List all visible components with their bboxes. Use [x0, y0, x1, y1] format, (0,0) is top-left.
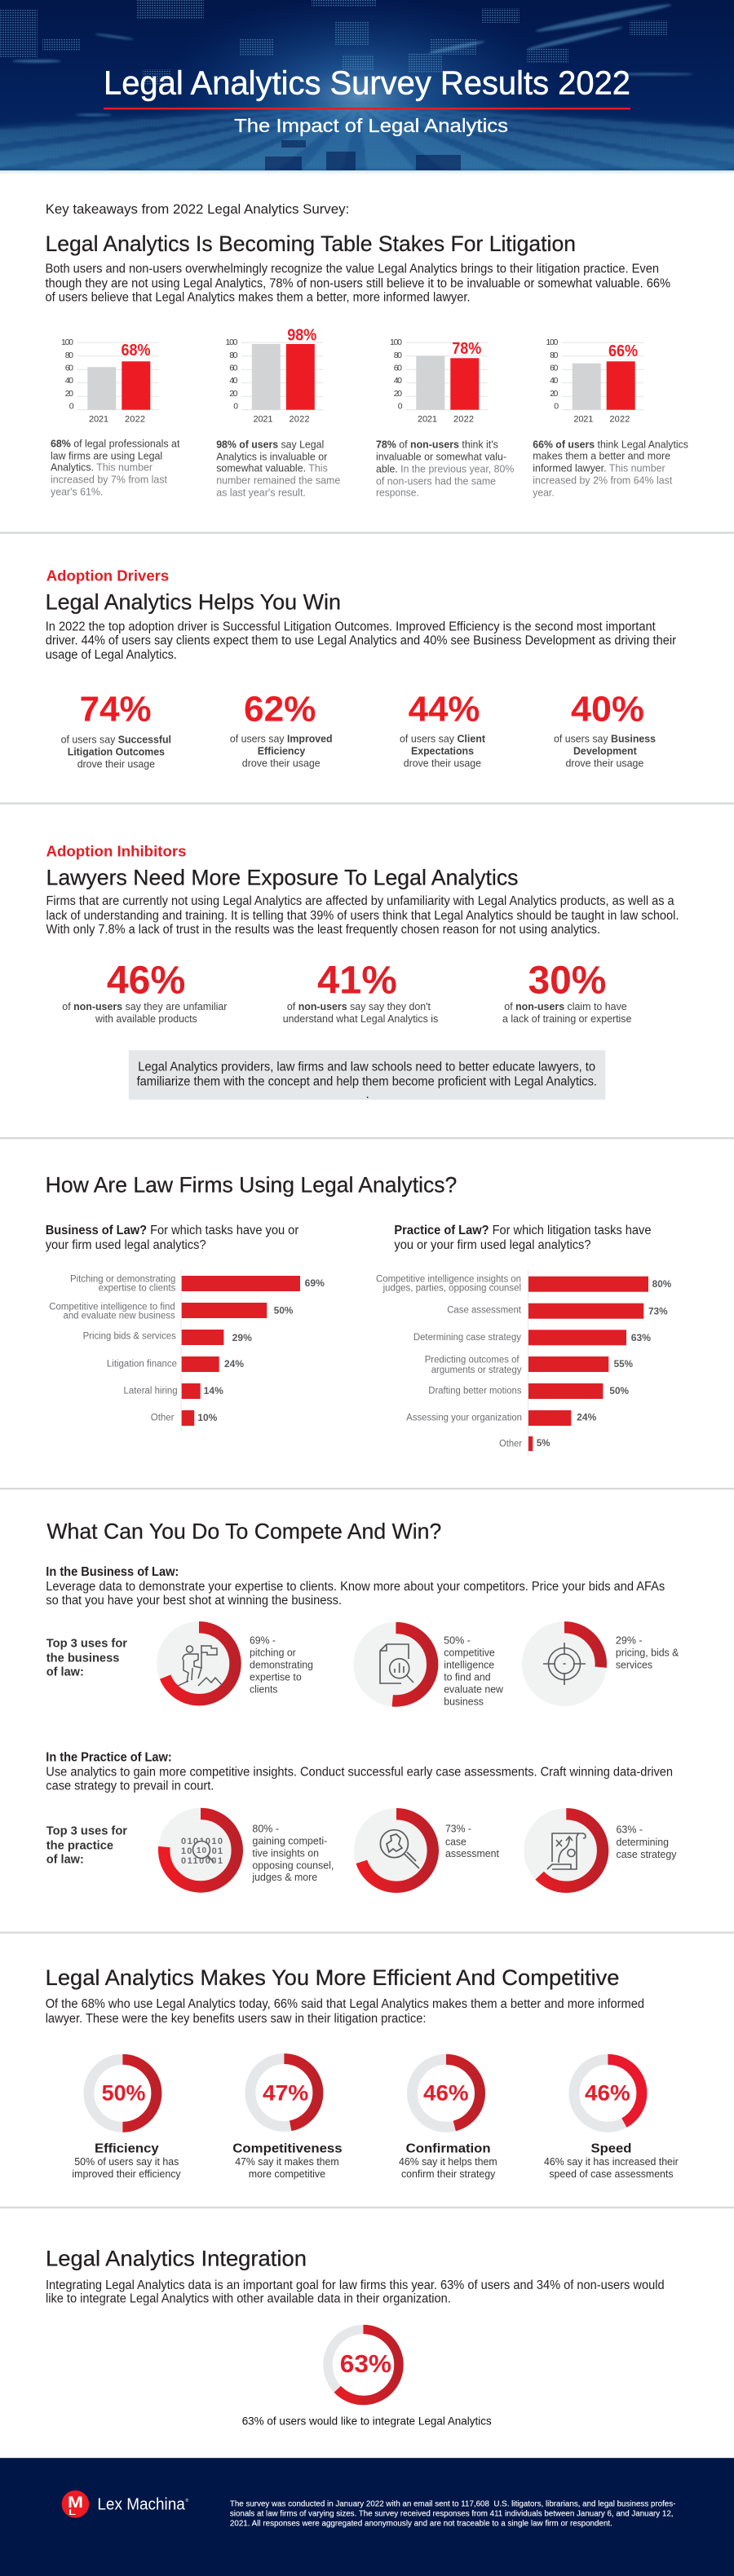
ring: 63%: 63%: [340, 2349, 391, 2378]
ring: competitiveness: [250, 2059, 318, 2126]
label: top 3 business: [46, 1637, 127, 1679]
text: practice of law: Use analytics to gain more competitive insights. Conduct successful early case assessments. Craft winning data-driven: [46, 1765, 673, 1779]
stat: 41%: of non-users say say they don't: [287, 1001, 431, 1012]
caption: 78%: 78% of non-users think it's: [376, 439, 498, 451]
caption: 98%: [216, 439, 340, 499]
caption: 78%: [376, 439, 514, 499]
body text: Integrating Legal Analytics data is an important goal for law firms this year. 63% of users and 34% of non-users would: [46, 2278, 665, 2292]
bar chart: business of law: 14%: [204, 1387, 223, 1396]
bar chart: 68%: 60: [65, 364, 73, 373]
bar chart: 66%: 66%: [608, 342, 638, 360]
intro line: Key takeaways from 2022 Legal Analytics Survey:: [46, 201, 349, 217]
label: 63%: [617, 1824, 677, 1860]
eyebrow: Adoption Inhibitors: [46, 843, 186, 860]
ring: 63%: [328, 2330, 399, 2400]
label: 73%: [445, 1824, 500, 1859]
bar chart: practice of law: 80%: [652, 1280, 671, 1290]
stat: 40%: 40%: [571, 689, 644, 729]
benefit: speed: speed of case assessments: [549, 2168, 674, 2180]
label: 73%: 73% -: [445, 1824, 471, 1835]
bar chart: practice of law: 55%: [614, 1360, 633, 1370]
label: 50%: intelligence: [444, 1660, 494, 1671]
stat: 40%: [554, 689, 656, 770]
icon: binary with magnifier: 0101010: [181, 1837, 223, 1846]
heading: Legal Analytics Integration: [46, 2246, 307, 2270]
panel: adoption inhibitors: [46, 843, 679, 1101]
bar chart: 68%: 68%: [121, 342, 151, 359]
benefit: efficiency: improved their efficiency: [72, 2168, 181, 2180]
bar chart: business of law: [49, 1269, 325, 1431]
ring: efficiency: [89, 2059, 157, 2127]
title: Legal Analytics Survey Results 2022: [104, 64, 630, 102]
label: 50%: to find and: [444, 1672, 491, 1683]
text: practice of law: case strategy to prevail in court.: [46, 1780, 214, 1793]
stat: 30%: 30%: [528, 959, 606, 1003]
donut: 80% insights: [158, 1808, 243, 1893]
stat: 74%: 74%: [80, 689, 152, 729]
donut: 69% pitching: [157, 1621, 241, 1705]
body text: [46, 262, 670, 305]
stat: 74%: drove their usage: [77, 759, 155, 770]
body text: [46, 2278, 665, 2306]
caption: 66%: informed lawyer. This number: [533, 463, 665, 474]
bar chart: practice of law: Assessing your organization: [406, 1414, 522, 1423]
benefit: efficiency: Efficiency: [95, 2142, 159, 2156]
text: business of law: so that you have your best shot at winning the business.: [46, 1594, 342, 1608]
heading: Legal Analytics Helps You Win: [46, 590, 341, 615]
bar chart: 98%: 60: [229, 364, 238, 373]
bar chart: 66%: 0: [554, 401, 559, 411]
caption: 68%: year's 61%.: [51, 487, 103, 498]
bar chart: practice of law: Case assessment: [447, 1306, 522, 1316]
benefit: competitiveness: 47% say it makes them: [235, 2156, 339, 2168]
caption: 68%: Analytics. This number: [51, 462, 153, 474]
bar chart: 66%: 60: [550, 364, 559, 373]
label: 63%: 63% -: [617, 1824, 643, 1835]
bar chart: 78%: 0: [398, 401, 403, 411]
icon: binary with magnifier: 0110001: [181, 1856, 223, 1866]
panel: adoption drivers: [46, 567, 676, 770]
ring: confirmation: 46%: [423, 2081, 469, 2106]
callout: [129, 1050, 605, 1101]
question: business of law: your firm used legal analytics?: [46, 1238, 206, 1252]
benefit: confirmation: Confirmation: [406, 2142, 491, 2156]
label: 29%: 29% -: [616, 1635, 643, 1647]
label: top 3 business: Top 3 uses for: [46, 1637, 127, 1650]
bar chart: 68%: 0: [69, 401, 74, 411]
bar chart: 98%: 80: [229, 351, 238, 360]
methodology note: sionals at law firms of varying sizes. The survey received responses from 411 individuals between January 6, and January 12,: [230, 2509, 673, 2519]
logo: [62, 2490, 189, 2518]
label: 29%: [616, 1635, 679, 1671]
bar chart: 98%: 98%: [287, 326, 316, 344]
bar chart: 68%: 80: [65, 351, 73, 360]
panel: integration: [46, 2246, 665, 2427]
benefit: speed: 46% say it has increased their: [544, 2156, 679, 2168]
body text: Firms that are currently not using Legal Analytics are affected by unfamiliarity with Legal Analytics products, as well as a: [46, 894, 674, 908]
eyebrow: Adoption Drivers: [46, 567, 169, 584]
bar chart: practice of law: Drafting better motions: [428, 1387, 522, 1396]
bar chart: business of law: 10%: [197, 1414, 217, 1423]
body text: [46, 894, 679, 937]
logo: ®: [186, 2498, 189, 2503]
body text: [46, 620, 676, 662]
ring caption: 63% of users would like to integrate Legal Analytics: [242, 2414, 492, 2427]
callout: Legal Analytics providers, law firms and law schools need to better educate lawyers, to: [138, 1060, 595, 1074]
bar chart: 98%: 40: [229, 376, 238, 386]
ring: efficiency: 50%: [102, 2081, 145, 2106]
icon: climber with flag: [178, 1645, 223, 1686]
caption: 98%: number remained the same: [216, 475, 340, 487]
panel: efficient and competitive: [46, 1965, 679, 2180]
stat: 40%: of users say Business: [554, 734, 656, 745]
stat: 62%: Efficiency: [258, 746, 305, 757]
label: 29%: pricing, bids &: [616, 1647, 679, 1659]
label: 73%: assessment: [445, 1848, 500, 1859]
label: 80%: tive insights on: [252, 1847, 319, 1859]
caption: 78%: of non-users had the same: [376, 476, 496, 487]
stat: 74%: of users say Successful: [61, 734, 171, 746]
icon: target: [543, 1643, 586, 1685]
label: top 3 practice: [46, 1825, 127, 1867]
bar chart: practice of law: 24%: [577, 1413, 596, 1423]
body text: though they are not using Legal Analytics, 78% of non-users still believe it to be invaluable or somewhat valuable. 66%: [46, 276, 670, 290]
icon: binary with magnifier: [181, 1837, 223, 1866]
heading: What Can You Do To Compete And Win?: [46, 1520, 441, 1544]
bar chart: business of law: Lateral hiring: [124, 1387, 178, 1396]
body text: usage of Legal Analytics.: [46, 648, 177, 662]
heading: Lawyers Need More Exposure To Legal Analytics: [46, 865, 519, 889]
stat: 46%: [62, 959, 227, 1025]
body text: lack of understanding and training. It is telling that 39% of users think that Legal Analytics should be taught in law school.: [46, 909, 679, 923]
stat: 30%: of non-users claim to have: [504, 1001, 627, 1012]
bar chart: practice of law: Other: [499, 1440, 522, 1449]
bar chart: 66%: 2021: [573, 414, 593, 424]
benefit: confirmation: [399, 2142, 497, 2180]
bar chart: 98%: 0: [233, 401, 238, 411]
stat: 44%: 44%: [409, 689, 480, 729]
label: 80%: judges & more: [251, 1872, 317, 1883]
bar chart: practice of law: 63%: [631, 1334, 651, 1343]
benefit: confirmation: 46% say it helps them: [399, 2156, 497, 2168]
bar chart: practice of law: Competitive intelligence insights on: [376, 1275, 521, 1285]
donut: 73% case assessment: [354, 1808, 439, 1893]
label: top 3 practice: the practice: [46, 1840, 113, 1853]
logo: L: [69, 2508, 76, 2517]
callout: familiarize them with the concept and help them become proficient with Legal Analytics.: [137, 1074, 597, 1088]
bar chart: business of law: 29%: [232, 1334, 252, 1343]
label: 73%: case: [445, 1836, 466, 1847]
caption: 98%: as last year's result.: [216, 487, 306, 499]
logo: Lex Machina: [97, 2495, 185, 2514]
donut: 29% pricing: [522, 1621, 607, 1706]
label: 50%: [444, 1635, 504, 1708]
ring: speed: [574, 2059, 642, 2127]
bar chart: 66%: 80: [550, 351, 559, 360]
icon: magnifier with puzzle: [380, 1830, 419, 1868]
icon: strategy scroll: [547, 1833, 586, 1869]
stat: 30%: [502, 959, 631, 1025]
label: 63%: case strategy: [617, 1849, 677, 1860]
header banner: [0, 0, 734, 170]
body text: In 2022 the top adoption driver is Successful Litigation Outcomes. Improved Efficiency is the second most important: [46, 620, 656, 633]
stat: 44%: of users say Client: [400, 734, 486, 745]
icon: binary with magnifier: 10: [197, 1846, 206, 1855]
bar chart: practice of law: 5%: [537, 1439, 550, 1449]
label: top 3 practice: Top 3 uses for: [46, 1825, 127, 1838]
question: business of law: Business of Law? For which tasks have you or: [46, 1224, 298, 1237]
methodology note: [230, 2499, 676, 2529]
caption: 66%: makes them a better and more: [533, 451, 670, 462]
label: 69%: 69% -: [250, 1635, 276, 1647]
bar chart: business of law: and evaluate new business: [64, 1312, 175, 1321]
caption: 68%: [51, 439, 180, 498]
bar chart: 78%: 20: [394, 389, 402, 399]
methodology note: The survey was conducted in January 2022 with an email sent to 117,608 U.S. litigators, librarians, and legal business profes-: [230, 2499, 676, 2509]
stat: 44%: Expectations: [411, 746, 474, 757]
stat: 40%: Development: [573, 746, 638, 757]
bar chart: 78%: [390, 337, 488, 424]
stat: 74%: Litigation Outcomes: [68, 747, 165, 758]
benefit: efficiency: [72, 2142, 181, 2180]
callout: .: [365, 1087, 369, 1101]
label: 80%: opposing counsel,: [252, 1859, 334, 1871]
stat: 41%: [283, 959, 438, 1025]
stat: 30%: a lack of training or expertise: [502, 1013, 631, 1025]
stat: 62%: [230, 689, 333, 770]
bar chart: 68%: [61, 337, 159, 424]
bar chart: practice of law: Determining case strategy: [413, 1333, 521, 1343]
bar chart: business of law: 50%: [274, 1306, 293, 1316]
bar chart: business of law: Competitive intelligence to find: [49, 1303, 175, 1312]
bar chart: 66%: 40: [550, 376, 559, 386]
bar chart: 78%: 60: [394, 364, 402, 373]
bar chart: practice of law: 50%: [609, 1387, 629, 1396]
label: 69%: pitching or: [250, 1647, 296, 1659]
caption: 78%: invaluable or somewhat valu-: [376, 452, 506, 463]
label: 63%: determining: [617, 1837, 669, 1848]
text: business of law: In the Business of Law:: [46, 1565, 179, 1579]
donut: 50% competitive intelligence: [353, 1622, 438, 1707]
caption: 78%: able. In the previous year, 80%: [376, 464, 514, 475]
label: 50%: competitive: [444, 1647, 495, 1659]
question: business of law: [46, 1224, 298, 1252]
bar chart: 78%: 100: [390, 337, 402, 347]
benefit: competitiveness: Competitiveness: [232, 2142, 343, 2156]
stat: 41%: 41%: [317, 959, 397, 1003]
label: top 3 practice: of law:: [46, 1854, 84, 1867]
label: 50%: evaluate new: [444, 1684, 504, 1696]
bar chart: business of law: Litigation finance: [107, 1360, 177, 1370]
bar chart: 68%: 20: [65, 389, 73, 399]
logo: M: [68, 2494, 83, 2512]
caption: 68%: law firms are using Legal: [51, 451, 162, 462]
text: business of law: [46, 1565, 665, 1608]
label: 69%: demonstrating: [250, 1660, 313, 1671]
label: 69%: expertise to: [250, 1672, 302, 1683]
stat: 44%: [400, 689, 486, 770]
bar chart: business of law: 69%: [305, 1279, 325, 1289]
stat: 44%: drove their usage: [404, 758, 481, 770]
bar chart: practice of law: 73%: [648, 1307, 668, 1317]
heading: How Are Law Firms Using Legal Analytics?: [46, 1172, 457, 1197]
stat: 41%: understand what Legal Analytics is: [283, 1013, 438, 1025]
bar chart: practice of law: [376, 1270, 671, 1456]
label: 50%: 50% -: [444, 1635, 471, 1647]
body text: driver. 44% of users say clients expect them to use Legal Analytics and 40% see Business Development as driving their: [46, 633, 676, 647]
bar chart: 66%: [546, 337, 643, 424]
benefit: confirmation: confirm their strategy: [401, 2168, 496, 2180]
caption: 98%: 98% of users say Legal: [216, 439, 324, 451]
bar chart: practice of law: Predicting outcomes of: [425, 1356, 520, 1365]
ring: confirmation: [413, 2059, 480, 2127]
body text: of users believe that Legal Analytics makes them a better, more informed lawyer.: [46, 290, 470, 305]
heading: Legal Analytics Makes You More Efficient And Competitive: [46, 1965, 619, 1990]
caption: 78%: response.: [376, 487, 419, 499]
bar chart: 98%: [225, 326, 323, 424]
methodology note: 2021. All responses were aggregated anonymously and are not traceable to a single law firm or respondent.: [230, 2519, 612, 2529]
bar chart: 66%: 2022: [609, 414, 630, 424]
body text: With only 7.8% a lack of trust in the results was the least frequently chosen reason for not using analytics.: [46, 923, 600, 937]
body text: Of the 68% who use Legal Analytics today, 66% said that Legal Analytics makes them a better and more informed: [46, 1997, 644, 2011]
label: top 3 business: the business: [46, 1652, 119, 1665]
icon: document with magnifier: [380, 1644, 413, 1683]
stat: 46%: of non-users say they are unfamiliar: [62, 1001, 227, 1012]
title underline: [104, 108, 630, 109]
benefit: competitiveness: more competitive: [249, 2168, 325, 2180]
text: business of law: Leverage data to demonstrate your expertise to clients. Know more about your competitors. Price your bids and AFAs: [46, 1580, 665, 1594]
panel: how firms use analytics: [46, 1172, 671, 1456]
label: 69%: clients: [250, 1684, 277, 1696]
bar chart: 98%: 100: [225, 337, 238, 347]
subtitle: The Impact of Legal Analytics: [234, 115, 508, 136]
question: practice of law: [394, 1224, 651, 1252]
bar chart: practice of law: arguments or strategy: [431, 1365, 522, 1375]
bar chart: 98%: 2021: [253, 414, 272, 424]
stat: 62%: drove their usage: [242, 758, 321, 770]
benefit: competitiveness: [232, 2142, 343, 2180]
bar chart: 68%: 2021: [89, 414, 108, 424]
bar chart: business of law: Pricing bids & services: [83, 1332, 176, 1342]
label: 29%: services: [616, 1660, 652, 1671]
bar chart: business of law: Pitching or demonstrating: [70, 1275, 175, 1285]
stat: 40%: drove their usage: [566, 758, 643, 770]
caption: 68%: 68% of legal professionals at: [51, 439, 180, 450]
bar chart: 68%: 40: [65, 376, 73, 386]
caption: 66%: increased by 2% from 64% last: [533, 475, 673, 487]
caption: 68%: increased by 7% from last: [51, 474, 168, 486]
benefit: speed: [544, 2142, 679, 2180]
heading: Legal Analytics Is Becoming Table Stakes For Litigation: [46, 232, 576, 256]
bar chart: 78%: 80: [394, 351, 402, 360]
caption: 98%: somewhat valuable. This: [216, 463, 328, 474]
panel: compete and win: [46, 1520, 679, 1893]
icon: binary with magnifier: 10 10 01: [181, 1846, 223, 1856]
caption: 98%: Analytics is invaluable or: [216, 452, 327, 463]
ring: speed: 46%: [585, 2081, 630, 2106]
panel: table stakes: [46, 232, 688, 499]
bar chart: business of law: 24%: [224, 1360, 244, 1370]
bar chart: 66%: 100: [546, 337, 559, 347]
bar chart: 78%: 78%: [452, 340, 481, 358]
bar chart: practice of law: judges, parties, opposing counsel: [382, 1284, 521, 1294]
stat: 62%: of users say Improved: [230, 734, 333, 745]
label: 80%: 80% -: [252, 1824, 279, 1835]
bar chart: 68%: 2022: [125, 414, 145, 424]
benefit: efficiency: 50% of users say it has: [74, 2156, 179, 2168]
stat: 74%: [61, 689, 171, 770]
question: practice of law: Practice of Law? For which litigation tasks have: [394, 1224, 651, 1237]
body text: lawyer. These were the key benefits users saw in their litigation practice:: [46, 2012, 426, 2026]
caption: 66%: 66% of users think Legal Analytics: [533, 439, 688, 451]
bar chart: 78%: 2022: [453, 414, 474, 424]
label: 80%: gaining competi-: [252, 1835, 327, 1846]
bar chart: business of law: Other: [151, 1414, 175, 1423]
footer: [0, 2458, 734, 2576]
label: 69%: [250, 1635, 313, 1696]
stat: 46%: 46%: [107, 959, 185, 1003]
bar chart: 98%: 2022: [289, 414, 310, 424]
label: top 3 business: of law:: [46, 1666, 84, 1679]
label: 80%: [251, 1824, 334, 1883]
bar chart: 78%: 40: [394, 376, 402, 386]
text: practice of law: In the Practice of Law:: [46, 1751, 172, 1765]
body text: [46, 1997, 644, 2026]
text: practice of law: [46, 1751, 673, 1793]
donut: 63% case strategy: [524, 1808, 608, 1893]
benefit: speed: Speed: [590, 2142, 631, 2156]
question: practice of law: you or your firm used legal analytics?: [394, 1238, 590, 1252]
label: 50%: business: [444, 1696, 484, 1708]
stat: 62%: 62%: [244, 689, 316, 729]
bar chart: 66%: 20: [550, 389, 559, 399]
caption: 66%: [533, 439, 688, 499]
body text: Both users and non-users overwhelmingly recognize the value Legal Analytics brings to their litigation practice. Even: [46, 262, 659, 276]
bar chart: 98%: 20: [229, 389, 238, 399]
stat: 46%: with available products: [95, 1013, 197, 1025]
bar chart: business of law: expertise to clients: [99, 1284, 176, 1294]
body text: like to integrate Legal Analytics with other available data in their organization.: [46, 2292, 451, 2306]
caption: 66%: year.: [533, 487, 555, 499]
ring: competitiveness: 47%: [263, 2081, 308, 2106]
bar chart: 68%: 100: [61, 337, 73, 347]
bar chart: 78%: 2021: [418, 414, 437, 424]
